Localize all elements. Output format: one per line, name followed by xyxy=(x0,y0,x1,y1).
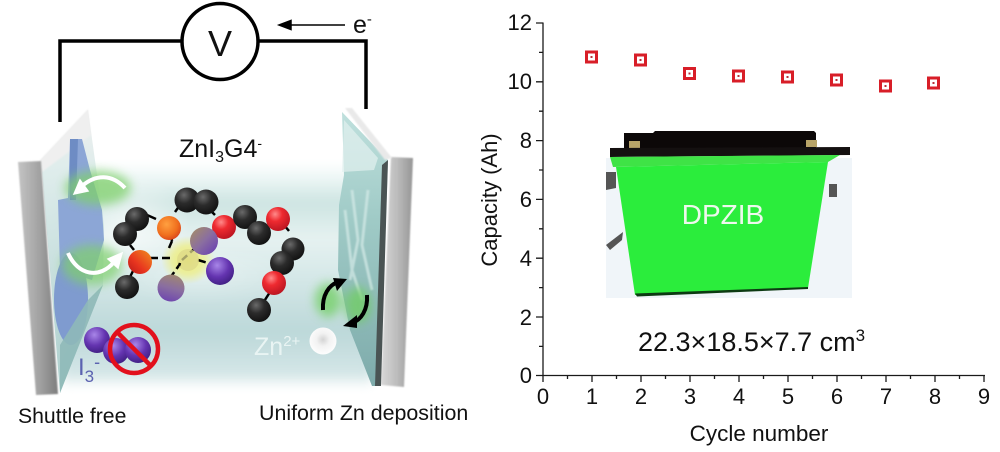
icon: white exchange arrow bottom xyxy=(68,253,122,273)
x axis labels: 0 xyxy=(537,384,549,409)
axes xyxy=(536,22,985,382)
right current collector xyxy=(381,157,413,387)
y axis labels: 6 xyxy=(520,187,532,212)
y axis labels: 8 xyxy=(520,128,532,153)
x axis labels: 6 xyxy=(831,384,843,409)
x axis labels: 5 xyxy=(782,384,794,409)
y axis labels: 12 xyxy=(508,10,532,35)
x axis labels: 9 xyxy=(978,384,990,409)
label: electron: e xyxy=(353,11,367,39)
panel: capacity chart xyxy=(477,10,990,446)
voltmeter xyxy=(182,4,258,80)
battery label: DPZIB xyxy=(682,199,764,230)
left current collector xyxy=(18,161,58,395)
label: zinc ion: Zn xyxy=(254,333,283,361)
label: triiodide: I xyxy=(78,354,85,381)
data points xyxy=(586,52,938,91)
x axis labels: 7 xyxy=(880,384,892,409)
x axis title: Cycle number xyxy=(690,421,829,446)
electrolyte xyxy=(60,162,375,388)
y axis title: Capacity (Ah) xyxy=(477,133,502,267)
green glow deposition xyxy=(315,283,371,323)
label: shuttle free: Shuttle free xyxy=(18,405,126,428)
x axis labels xyxy=(537,384,990,409)
battery photo xyxy=(606,131,852,298)
y axis labels xyxy=(508,10,532,388)
x axis labels: 8 xyxy=(929,384,941,409)
right zinc anode xyxy=(338,108,392,386)
circuit wire xyxy=(60,41,366,122)
x axis labels: 1 xyxy=(586,384,598,409)
x axis labels: 3 xyxy=(684,384,696,409)
y axis labels: 10 xyxy=(508,69,532,94)
voltmeter: V xyxy=(208,23,232,64)
battery body xyxy=(610,155,840,167)
battery dimensions: 3 xyxy=(856,326,865,345)
panel: battery cell schematic xyxy=(18,4,468,428)
molecule: ZnI3G4 complex xyxy=(113,188,304,322)
label: complex formula: - xyxy=(257,135,262,151)
green glow bottom xyxy=(62,245,122,285)
y axis labels: 2 xyxy=(520,305,532,330)
battery dimensions: 22.3×18.5×7.7 cm xyxy=(638,327,856,357)
label: complex formula: G4 xyxy=(224,135,257,163)
left glass panel xyxy=(41,110,104,393)
label: zinc ion: 2+ xyxy=(283,333,301,350)
y axis labels: 0 xyxy=(520,363,532,388)
icon: zinc ion sphere xyxy=(310,328,336,354)
molecule: triiodide with prohibition sign xyxy=(84,325,158,373)
x axis labels: 2 xyxy=(635,384,647,409)
green glow top xyxy=(65,171,131,205)
y axis labels: 4 xyxy=(520,246,532,271)
label: complex formula: 3 xyxy=(215,149,224,166)
label: triiodide: - xyxy=(94,352,100,372)
label: electron: - xyxy=(367,11,372,28)
label: uniform deposition: Uniform Zn deposition xyxy=(259,401,468,425)
label: complex formula: ZnI xyxy=(179,135,215,163)
left cathode plates xyxy=(54,139,104,345)
battery cap xyxy=(624,131,816,148)
icon: black deposition arrows xyxy=(323,278,367,328)
x axis labels: 4 xyxy=(733,384,745,409)
arrow: electron flow xyxy=(279,20,345,30)
left floor wedge xyxy=(60,285,103,393)
icon: white exchange arrow top xyxy=(74,177,125,194)
label: triiodide: 3 xyxy=(85,367,94,386)
